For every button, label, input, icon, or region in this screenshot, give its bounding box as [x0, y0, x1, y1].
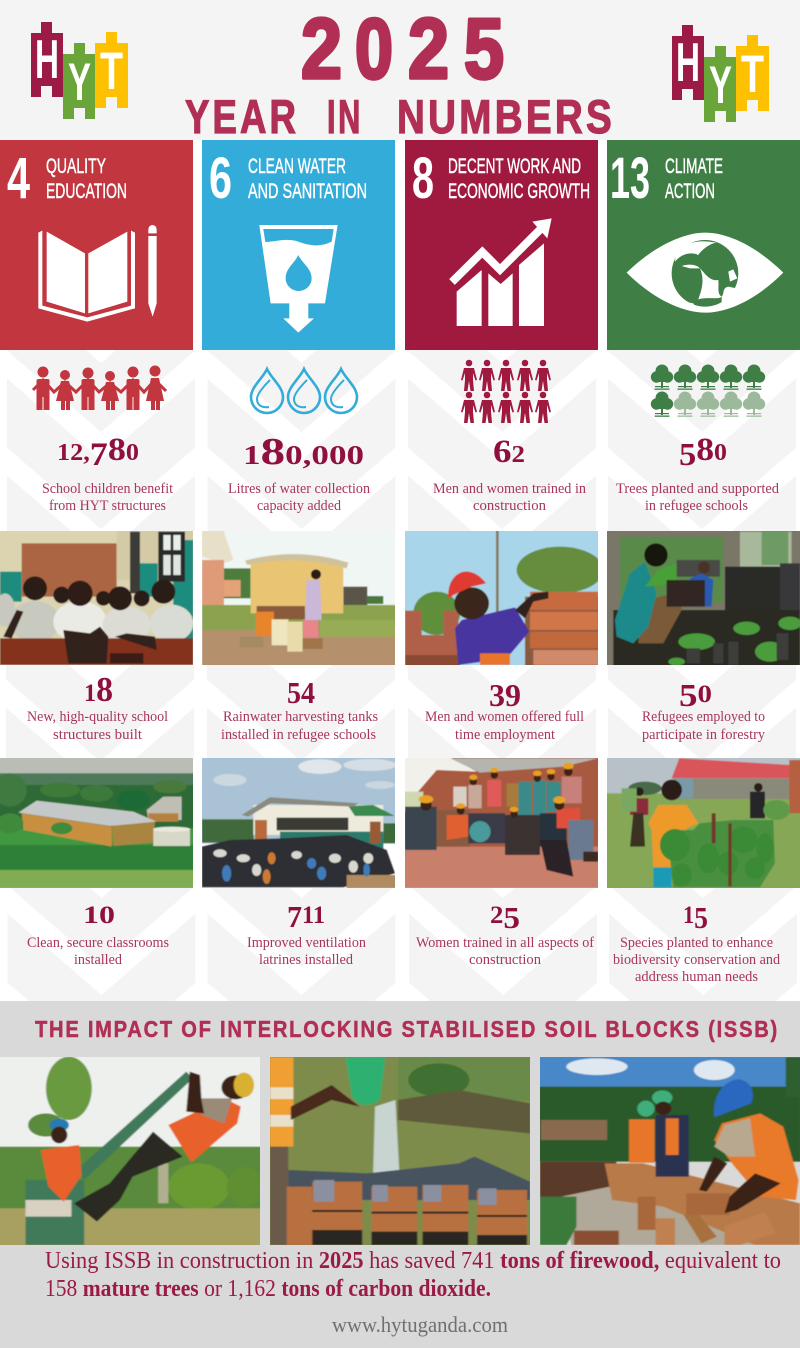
photo: boy with sapling — [605, 757, 800, 890]
stat: 12,780 children: School children benefit — [42, 481, 173, 497]
logo: HYT right: Y — [709, 56, 732, 115]
title: 2025: 2 — [408, 2, 449, 97]
text: ISSB savings statement — [45, 1248, 781, 1302]
panel: SDG 6 clean water and sanitation — [202, 140, 395, 350]
logo: HYT left: Y — [68, 53, 91, 112]
stat: 15 species: 5 — [694, 900, 708, 935]
icon: water glass and arrow — [259, 225, 338, 333]
panel: SDG 4 quality education: 4 — [7, 146, 30, 211]
stat: 15 species: address human needs — [635, 969, 758, 985]
panel: SDG 6 clean water and sanitation: CLEAN WATER — [248, 155, 346, 178]
stat: 15 species: Species planted to enhance — [620, 935, 773, 951]
title: 2025: 5 — [464, 2, 504, 97]
photo: watering soil blocks — [268, 1055, 533, 1248]
photo: crowd at latrine building — [200, 757, 397, 888]
title: year in numbers — [185, 90, 615, 143]
photo: rainwater tank — [200, 530, 399, 667]
icon: ten people — [461, 360, 551, 423]
logo: HYT left: H — [35, 28, 59, 90]
stat: 50 refugees employed: 5 — [679, 677, 698, 713]
stat: 711 latrines: latrines installed — [259, 952, 354, 968]
stat: 180,000 litres: Litres of water collection — [228, 481, 371, 497]
title: year in numbers: IN — [327, 90, 363, 143]
icon: eye with globe — [627, 233, 783, 313]
stat: 62 trained: 62 — [493, 434, 525, 470]
header band — [0, 0, 800, 143]
stat: 62 trained: construction — [473, 498, 547, 514]
stat: 12,780 children — [42, 432, 173, 514]
stat: 180,000 litres — [228, 431, 371, 514]
icon: book and pencil — [38, 225, 157, 322]
stat: 12,780 children: from HYT structures — [49, 498, 166, 514]
stat: 711 latrines: Improved ventilation — [247, 935, 367, 951]
stat: 39 employed: 39 — [489, 677, 521, 713]
panel: SDG 6 clean water and sanitation: 6 — [209, 146, 232, 211]
stat: 18 school structures: New, high-quality school — [27, 709, 168, 725]
logo: HYT left — [31, 22, 128, 119]
stat: 18 school structures — [27, 670, 168, 743]
chevron background: row 3 — [8, 888, 797, 1001]
stat: 10 classrooms — [27, 902, 169, 968]
stat: 50 refugees employed — [642, 677, 766, 743]
stat: 25 women trained: Women trained in all aspects of — [416, 935, 594, 951]
icon: row of children holding hands — [33, 366, 166, 410]
stat: 54 rainwater tanks — [221, 675, 378, 743]
title: 2025 — [301, 2, 504, 97]
panel: SDG 13 climate action: 13 — [610, 146, 650, 211]
stat: 12,780 children: 0 — [126, 440, 138, 466]
stat: 711 latrines — [247, 899, 367, 968]
panel: SDG 13 climate action: CLIMATE — [665, 155, 723, 178]
stat: 10 classrooms: installed — [74, 952, 123, 968]
stat: 50 refugees employed: Refugees employed to — [642, 709, 765, 725]
logo: HYT right: T — [741, 45, 764, 104]
stat: 18 school structures: 18 — [84, 670, 113, 709]
stat: 580 trees: in refugee schools — [645, 498, 748, 514]
stat: 54 rainwater tanks: Rainwater harvesting tanks — [223, 709, 378, 725]
stat: 50 refugees employed: 0 — [698, 681, 712, 708]
icon: ten trees — [651, 364, 765, 417]
photo: school building in green landscape — [0, 757, 195, 888]
stat: 39 employed: time employment — [455, 727, 555, 743]
stat: 580 trees: 5 — [679, 436, 696, 472]
photo: refugees with seedlings — [605, 530, 800, 667]
text: ISSB savings statement: Using ISSB in construction in 2025 has saved 741 tons of firewood, equivalent to — [45, 1248, 781, 1274]
stat: 15 species: 1 — [683, 902, 696, 929]
stat: 10 classrooms: Clean, secure classrooms — [27, 935, 169, 951]
stat: 15 species — [613, 900, 781, 985]
panel: SDG 8 decent work and economic growth: 8 — [412, 146, 434, 211]
panel: SDG 8 decent work and economic growth — [405, 140, 598, 350]
stat: 10 classrooms: 10 — [83, 902, 115, 929]
stat: 25 women trained — [416, 900, 594, 968]
panel: SDG 8 decent work and economic growth: DECENT WORK AND — [448, 155, 581, 178]
photo: workers laying interlocking blocks — [538, 1055, 800, 1245]
text: ISSB savings statement: 158 mature trees or 1,162 tons of carbon dioxide. — [45, 1276, 491, 1302]
stat: 180,000 litres: 180,000 — [243, 431, 364, 473]
stat: 18 school structures: structures built — [53, 727, 142, 743]
photo: children in classroom — [0, 530, 195, 667]
chevron background: row 1 — [7, 350, 796, 531]
stat: 25 women trained: construction — [469, 952, 542, 968]
stat: 39 employed: Men and women offered full — [425, 709, 584, 725]
stat: 711 latrines: 11 — [302, 902, 325, 929]
stat: 25 women trained: 5 — [503, 900, 520, 935]
panel: ISSB impact — [0, 1001, 800, 1348]
chevron background: row 2 — [6, 665, 796, 758]
panel: SDG 8 decent work and economic growth: ECONOMIC GROWTH — [448, 180, 590, 203]
logo: HYT right: H — [676, 31, 700, 93]
stat: 12,780 children: 12, — [57, 440, 87, 466]
stat: 54 rainwater tanks: 54 — [287, 675, 315, 710]
logo: HYT left: T — [100, 42, 123, 101]
text: website: www.hytuganda.com — [332, 1312, 508, 1337]
stat: 580 trees: Trees planted and supported — [616, 481, 780, 497]
stat: 54 rainwater tanks: installed in refugee schools — [221, 727, 376, 743]
panel: SDG 4 quality education — [0, 140, 193, 350]
stat: 580 trees: 0 — [714, 440, 726, 466]
title: year in numbers: YEAR — [185, 90, 299, 143]
icon: rising bar chart with arrow — [452, 218, 552, 326]
title: 2025: 2 — [301, 2, 342, 97]
photo: worker on block press — [0, 1055, 263, 1247]
stat: 580 trees: 8 — [696, 432, 714, 468]
stat: 180,000 litres: capacity added — [257, 498, 342, 514]
panel: SDG 4 quality education: EDUCATION — [46, 180, 127, 203]
panel: SDG 4 quality education: QUALITY — [46, 155, 106, 178]
stat: 50 refugees employed: participate in forestry — [642, 727, 766, 743]
stat: 580 trees — [616, 432, 780, 514]
stat: 25 women trained: 2 — [490, 902, 502, 929]
stat: 12,780 children: 7 — [90, 437, 108, 473]
stat: 711 latrines: 7 — [287, 899, 302, 934]
panel: SDG 13 climate action: ACTION — [665, 180, 715, 203]
photo: construction crew group — [403, 757, 600, 888]
title: year in numbers: NUMBERS — [397, 90, 615, 143]
stat: 15 species: biodiversity conservation and — [613, 952, 781, 968]
icon: three water drops — [251, 369, 357, 413]
stat: 39 employed — [425, 677, 584, 743]
logo: HYT right — [672, 25, 769, 122]
panel: SDG 6 clean water and sanitation: AND SANITATION — [248, 180, 367, 203]
stat: 62 trained — [433, 434, 587, 514]
title: 2025: 0 — [355, 2, 393, 97]
stat: 12,780 children: 8 — [108, 432, 126, 468]
stat: 62 trained: Men and women trained in — [433, 481, 587, 497]
photo: woman laying bricks — [403, 530, 603, 667]
panel: SDG 13 climate action — [607, 140, 800, 350]
